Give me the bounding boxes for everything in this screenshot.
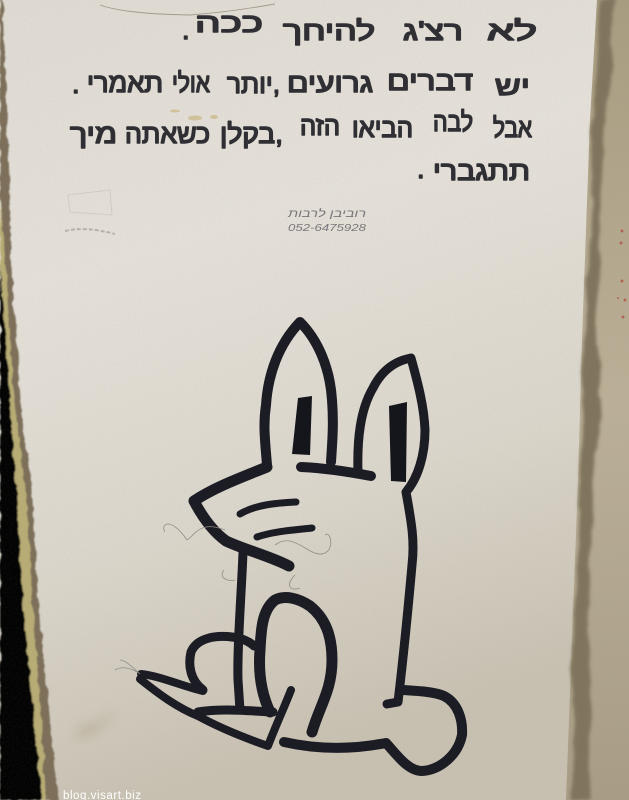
line 3: בקלן, [220,119,283,149]
line 2: . [72,69,80,99]
lower foot [140,679,291,746]
small signature and phone number: רוביבן לרבות [287,207,366,220]
left ear [264,322,333,465]
lower whisker [257,528,312,537]
line 3: הזה [300,111,340,141]
line 1: . [182,15,190,45]
haunch [259,598,332,732]
right ear and back [358,358,425,704]
line 2: יש [495,71,530,101]
line 1: להיחך [283,16,375,46]
line 4: תתגברי [433,156,530,186]
line 2 [72,66,530,101]
foot bar [198,710,273,712]
line 2: גרועים [287,68,373,98]
line 2: אולי [172,68,210,98]
chest line [238,553,243,710]
right side: rough stone wall [566,0,629,800]
tail [284,690,462,771]
bar between ears [301,467,371,476]
handwritten message [70,8,537,186]
left side: dark gap and yellow-brown edge [0,0,58,800]
line 3: מיך [70,119,117,149]
toe [141,674,203,691]
line 3: אבל [493,113,532,143]
crack at top of wall [100,4,275,15]
front paw [190,636,254,690]
left eye mark [292,396,312,455]
line 2: תאמרי [87,68,163,98]
line 4: . [417,154,425,184]
line 1: לא [487,16,537,46]
line 3: הביאו [352,113,413,143]
small signature and phone number: 052-6475928 [288,222,366,234]
faded pencil marks [65,190,115,234]
line 1: רצ'ג [403,16,463,46]
stain on wall [75,708,118,738]
line 3: לבה [433,107,473,137]
right eye mark [389,402,407,482]
line 1 [182,8,537,46]
line 2: יותר, [227,69,280,99]
thin pencil hairs [115,524,331,674]
small signature and phone number [287,207,366,234]
upper whisker [240,502,296,514]
line 3 [70,107,532,149]
head top and snout [194,467,289,566]
rabbit drawing [115,322,462,771]
yellow flecks on wall [170,110,218,120]
line 1: ככה [195,8,263,38]
line 2: דברים [387,66,473,96]
line 3: כשאתה [125,119,210,149]
